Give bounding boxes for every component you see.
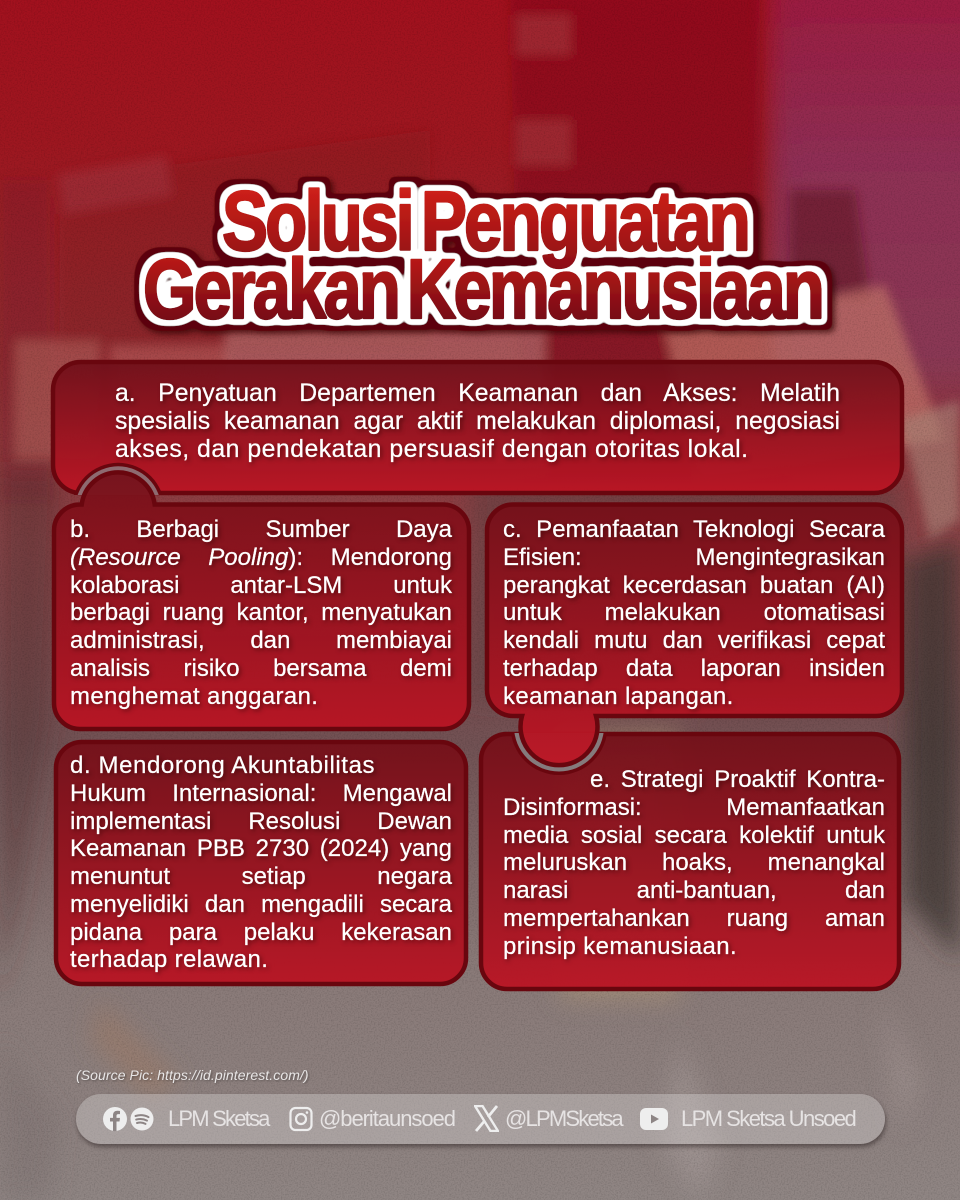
- text: d: [70, 752, 455, 976]
- text: c: perangkat kecerdasan buatan (AI): [503, 572, 885, 598]
- text: e: prinsip kemanusiaan.: [503, 932, 737, 960]
- icon: instagram: [289, 1106, 313, 1132]
- text: e: meluruskan hoaks, menangkal: [503, 849, 885, 876]
- panel: a: [50, 360, 904, 496]
- text: a: spesialis keamanan agar aktif melakukan diplomasi, negosiasi: [115, 408, 840, 435]
- text: b: berbagi ruang kantor, menyatukan: [70, 599, 452, 626]
- text: e: [503, 766, 888, 962]
- label: LPM Sketsa: LPM Sketsa: [168, 1106, 269, 1131]
- panel: c: [484, 502, 904, 768]
- text: e: Disinformasi: Memanfaatkan: [503, 794, 885, 821]
- icon: youtube: [640, 1108, 668, 1130]
- text: e: e. Strategi Proaktif Kontra-: [590, 766, 885, 793]
- text: d: terhadap relawan.: [70, 946, 268, 973]
- source credit: (Source Pic: https://id.pinterest.com/): [76, 1067, 309, 1083]
- icon: spotify: [130, 1108, 154, 1130]
- text: c: keamanan lapangan.: [503, 682, 734, 710]
- text: e: media sosial secara kolektif untuk: [503, 822, 885, 848]
- text: d: Keamanan PBB 2730 (2024) yang: [70, 835, 452, 862]
- text: c: [503, 516, 888, 713]
- text: e: mempertahankan ruang aman: [503, 905, 885, 932]
- panel: d: [54, 740, 468, 986]
- text: c: c. Pemanfaatan Teknologi Secara: [503, 516, 885, 543]
- icon: facebook: [103, 1107, 127, 1131]
- text: b: [70, 516, 455, 714]
- text: b: b. Berbagi Sumber Daya: [70, 516, 452, 543]
- title: Solusi Penguatan: [222, 174, 748, 268]
- panel: e: [478, 732, 902, 992]
- title: Gerakan Kemanusiaan: [143, 242, 822, 336]
- text: d: menyelidiki dan mengadili secara: [70, 891, 452, 918]
- label: @LPMSketsa: @LPMSketsa: [505, 1106, 622, 1131]
- text: d: d. Mendorong Akuntabilitas: [70, 752, 375, 779]
- text: c: kendali mutu dan verifikasi cepat: [503, 627, 885, 654]
- text: d: implementasi Resolusi Dewan: [70, 808, 452, 834]
- text: a: akses, dan pendekatan persuasif dengan otoritas lokal.: [115, 436, 749, 462]
- text: b: analisis risiko bersama demi: [70, 655, 452, 682]
- text: c: terhadap data laporan insiden: [503, 655, 885, 682]
- label: @beritaunsoed: @beritaunsoed: [319, 1106, 455, 1131]
- title: [134, 174, 840, 338]
- text: b: menghemat anggaran.: [70, 682, 318, 710]
- text: c: Efisien: Mengintegrasikan: [503, 544, 885, 571]
- text: b: kolaborasi antar-LSM untuk: [70, 572, 452, 598]
- text: c: untuk melakukan otomatisasi: [503, 599, 885, 626]
- text: d: Hukum Internasional: Mengawal: [70, 780, 452, 807]
- text: b: administrasi, dan membiayai: [70, 627, 452, 654]
- icon: X: [474, 1105, 499, 1132]
- text: d: menuntut setiap negara: [70, 863, 452, 890]
- social media bar: [76, 1094, 885, 1144]
- text: b: (Resource Pooling): Mendorong: [70, 544, 452, 571]
- label: LPM Sketsa Unsoed: LPM Sketsa Unsoed: [681, 1106, 855, 1131]
- panel: b: [52, 462, 472, 732]
- text: e: narasi anti-bantuan, dan: [503, 877, 885, 904]
- text: a: a. Penyatuan Departemen Keamanan dan Akses: Melatih: [115, 380, 840, 407]
- text: a: [115, 380, 842, 466]
- text: d: pidana para pelaku kekerasan: [70, 918, 452, 946]
